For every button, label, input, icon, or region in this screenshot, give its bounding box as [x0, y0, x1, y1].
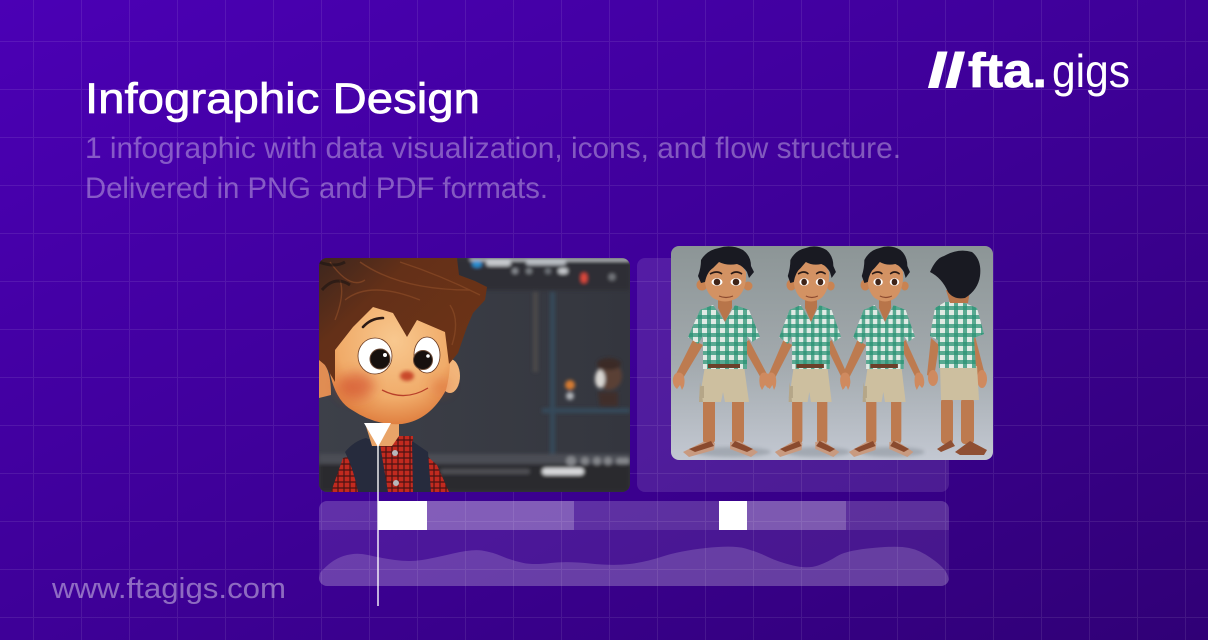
ears [319, 359, 460, 398]
clip segment 2 [747, 501, 846, 530]
logo: fta.gigs [929, 44, 1130, 98]
image: character turnaround sheet [671, 246, 993, 460]
three quarter view, right [840, 246, 925, 457]
logo: fta.gigs: fta. [968, 45, 1047, 98]
face [330, 307, 450, 424]
logo: fta.gigs: gigs [1052, 45, 1130, 97]
eyes [358, 337, 440, 374]
timeline track [319, 501, 949, 530]
image: cartoon boy in animation software [319, 258, 630, 492]
hair [319, 258, 487, 382]
description text: Delivered in PNG and PDF formats. [85, 172, 548, 205]
backing panel [637, 258, 949, 492]
timeline [319, 501, 949, 586]
logo: fta.gigs: // [929, 44, 964, 96]
title: Infographic Design [85, 75, 480, 123]
audio waveform [319, 547, 949, 586]
three quarter view [766, 246, 851, 457]
description text: 1 infographic with data visualization, icons, and flow structure. [85, 132, 901, 165]
description text [85, 132, 901, 205]
back view [927, 251, 987, 455]
playhead [364, 423, 391, 606]
front view [673, 246, 771, 457]
white marker 2 [719, 501, 747, 530]
shirt and vest [331, 423, 449, 492]
blurred small character [595, 358, 622, 406]
cheeks [338, 373, 450, 399]
white marker 1 [378, 501, 427, 530]
eyebrow, nose and smile [363, 318, 428, 396]
blurred software interface [319, 258, 630, 492]
website url: www.ftagigs.com [51, 573, 286, 605]
clip segment 1 [427, 501, 574, 530]
